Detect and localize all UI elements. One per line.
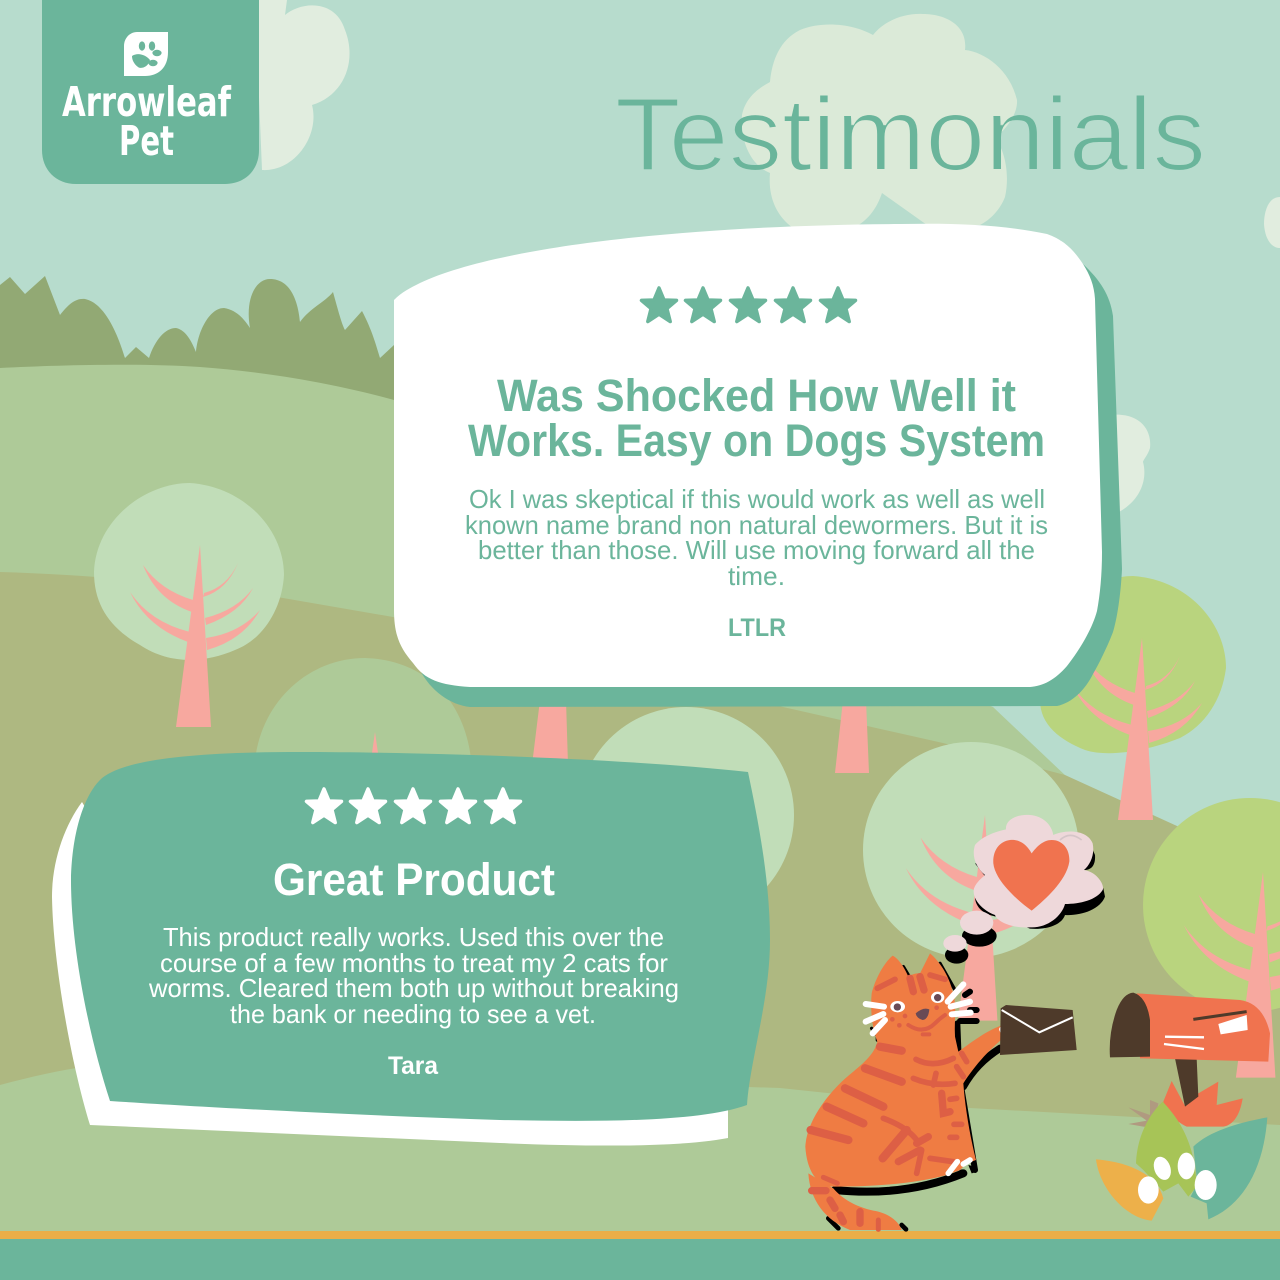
- tree right of cat: [863, 742, 1079, 1021]
- tree middle hidden: [255, 658, 472, 770]
- card two body: [71, 752, 770, 1121]
- panel: review two: [52, 752, 770, 1146]
- logo panel: [42, 0, 259, 184]
- review one body: time.: [728, 561, 785, 591]
- review one headline: Was Shocked How Well it: [497, 370, 1016, 421]
- light green hill: [0, 365, 1067, 1100]
- title: Testimonials: [615, 77, 1206, 193]
- card one body: [394, 224, 1102, 687]
- tree right lime crown: [1040, 576, 1226, 753]
- tree left: [94, 483, 284, 727]
- review one headline: [468, 370, 1045, 466]
- cloud behind logo: [255, 0, 350, 170]
- small cloud right edge: [1264, 197, 1280, 248]
- review one body: known name brand non natural dewormers. But it is: [465, 510, 1048, 540]
- review two body: This product really works. Used this over the: [163, 922, 664, 952]
- icon: thought bubble with heart: [943, 815, 1105, 964]
- icon: envelope: [1000, 1005, 1077, 1055]
- cloud behind title: [742, 14, 1017, 228]
- olive hill: [0, 572, 1280, 1140]
- bottom bar: [0, 1239, 1280, 1280]
- trunks under card: [532, 700, 869, 773]
- card two shadow: [52, 802, 728, 1146]
- logo icon: leaf with paw: [124, 32, 168, 76]
- tree right lime trunk: [1072, 638, 1202, 820]
- star rating two: [306, 789, 520, 822]
- review one body: better than those. Will use moving forward all the: [478, 535, 1035, 565]
- orange stripe: [0, 1231, 1280, 1239]
- icon: red grass: [1128, 1081, 1243, 1128]
- tree far right: [1143, 798, 1280, 1078]
- tree centre: [578, 707, 794, 923]
- review two body: the bank or needing to see a vet.: [230, 999, 596, 1029]
- icon: orange cat: [805, 953, 1007, 1230]
- cloud behind card: [1110, 415, 1150, 516]
- icon: leaves with paw prints: [1096, 1102, 1267, 1221]
- star rating one: [642, 288, 856, 322]
- review one body: [465, 484, 1048, 591]
- review two headline: Great Product: [273, 854, 555, 905]
- icon: mailbox: [1110, 993, 1270, 1107]
- illustration: cat, bubble, mailbox and leaves: [805, 815, 1270, 1230]
- review two body: worms. Cleared them both up without breaking: [148, 973, 679, 1003]
- foreground hill: [0, 1066, 1280, 1240]
- logo wordmark: Arrowleaf: [62, 78, 232, 126]
- panel: review one: [394, 224, 1122, 707]
- review one headline: Works. Easy on Dogs System: [468, 415, 1045, 466]
- review one author: LTLR: [728, 614, 786, 642]
- forest silhouette: [0, 276, 394, 410]
- logo wordmark: Pet: [119, 117, 174, 165]
- card one shadow: [420, 240, 1122, 707]
- review two body: [148, 922, 679, 1029]
- review two author: Tara: [388, 1052, 439, 1080]
- logo wordmark: [62, 78, 232, 165]
- review two body: course of a few months to treat my 2 cats for: [160, 948, 668, 978]
- review one body: Ok I was skeptical if this would work as well as well: [469, 484, 1045, 514]
